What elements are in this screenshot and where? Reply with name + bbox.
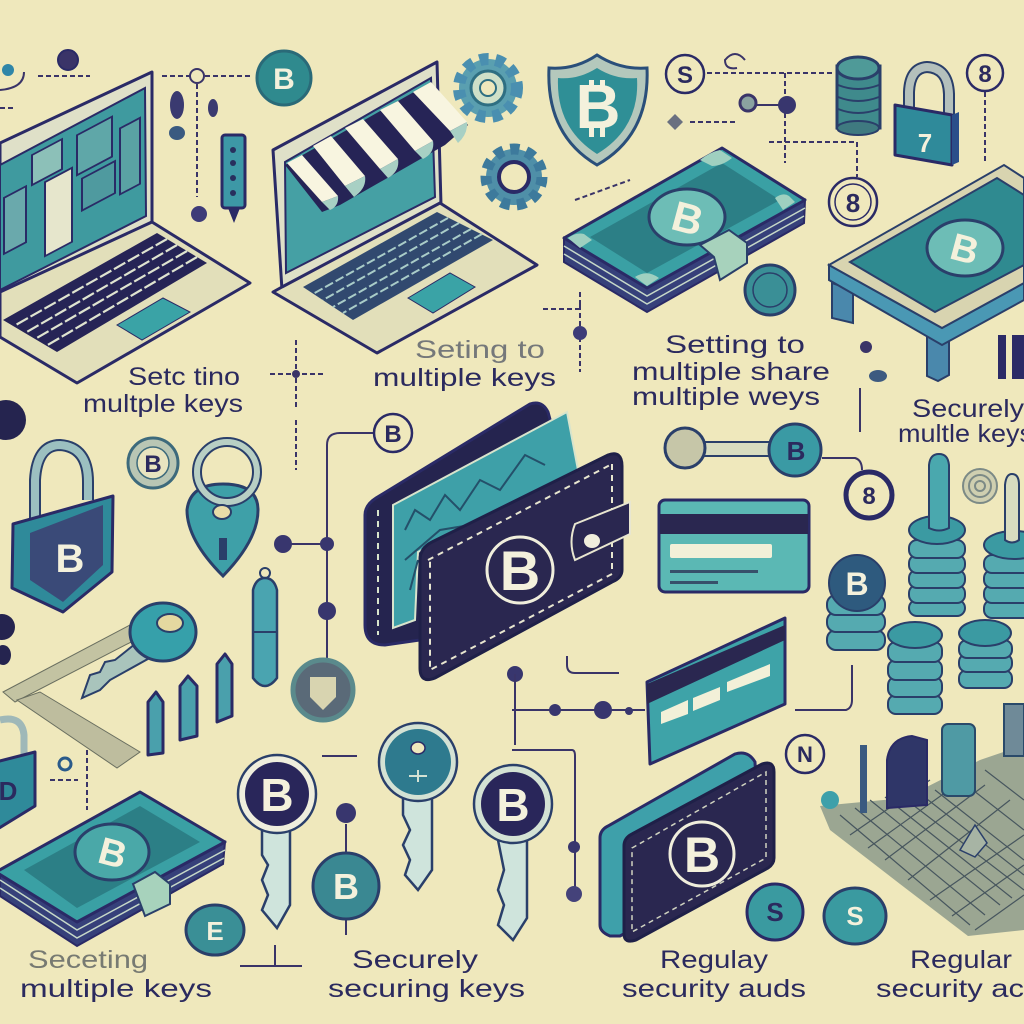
icon: heart lock with ring <box>187 442 258 576</box>
icon: lower left padlock <box>0 719 87 830</box>
gear: upper <box>459 59 517 117</box>
text: label 3: multiple weys <box>632 383 820 411</box>
text: bottom label 2: Securely <box>352 946 479 974</box>
icon: key fob <box>222 135 245 223</box>
icon: horizontal key: B <box>787 436 805 466</box>
coin: grey bitcoin: B <box>144 451 162 478</box>
table with bill <box>829 165 1024 381</box>
text: label 4 <box>898 395 1024 448</box>
text: label 3: multiple share <box>632 358 830 386</box>
coin: grey bitcoin <box>128 438 178 488</box>
coin: number circle <box>829 178 877 226</box>
icon: coin cylinder <box>837 57 880 135</box>
text: label 2: Seting to <box>415 336 545 364</box>
coin: circle 8: 8 <box>862 483 876 510</box>
coin: small E: E <box>206 916 224 946</box>
coin: top bitcoin <box>257 51 311 105</box>
icon: teal key with strips <box>3 603 196 768</box>
text: label 1 <box>83 363 243 418</box>
icon: bitcoin shield: B <box>576 73 620 142</box>
text: label 4: multle keys <box>898 420 1024 448</box>
text: bottom label 2: securing keys <box>328 975 525 1003</box>
icon: padlock with shield: B <box>56 537 84 581</box>
text: bottom label 3 <box>622 946 806 1003</box>
text: label 2: multiple keys <box>373 364 556 392</box>
text: bottom label 1: Seceting <box>28 946 148 974</box>
coin stacks with pins: B <box>845 566 869 602</box>
text: bottom label 3: Regulay <box>660 946 769 974</box>
icon: horizontal key <box>665 424 862 476</box>
text: bottom label 4 <box>876 946 1024 1003</box>
icon: bitcoin shield <box>549 55 647 165</box>
text: bottom label 2 <box>328 946 525 1003</box>
money stack: lower <box>0 792 225 946</box>
money stack: lower: B <box>94 830 131 878</box>
text: label 1: Setc tino <box>128 363 240 391</box>
text: label 4: Securely <box>912 395 1024 423</box>
icon: large bitcoin wallet <box>365 403 630 680</box>
coin: number circle: 8 <box>846 188 860 218</box>
icon: key with keyhole head <box>379 723 457 890</box>
gear: lower <box>486 149 542 205</box>
icon: padlock top right <box>895 67 959 165</box>
connectors: top right <box>540 54 985 309</box>
icon: large bitcoin wallet: B <box>500 539 540 602</box>
text: bottom label 1: multiple keys <box>20 975 212 1003</box>
icon: key with bitcoin head right: B <box>496 779 530 831</box>
money stack: upper: B <box>667 192 708 245</box>
text: bottom label 4: security ac <box>876 975 1024 1003</box>
coin: small teal <box>745 265 795 315</box>
credit card: front facing <box>659 500 809 592</box>
coin: B teal with stem: B <box>333 866 359 907</box>
icon: key with bitcoin head: B <box>260 769 294 821</box>
text: bottom label 1 <box>20 946 212 1003</box>
coin: S upper: S <box>677 62 693 89</box>
text: label 3: Setting to <box>665 331 805 359</box>
coin stacks with pins <box>827 454 1024 714</box>
coin: top bitcoin: B <box>273 63 295 96</box>
network: centre vertical with B node <box>274 414 412 660</box>
table with bill: B <box>946 226 983 274</box>
coin: small E <box>186 905 244 955</box>
connectors: middle divider <box>270 305 1024 470</box>
icon: fingerprint <box>963 469 997 503</box>
laptop: dashboard <box>0 72 250 383</box>
icon: dark circle left edge <box>0 400 26 440</box>
money stack: upper <box>564 148 805 312</box>
coin: S upper <box>666 55 704 93</box>
text: bottom label 3: security auds <box>622 975 806 1003</box>
coin: N circle <box>786 735 824 773</box>
coin: B teal with stem <box>313 803 379 935</box>
network: card connectors <box>507 656 852 902</box>
icon: key with bitcoin head right <box>474 765 552 940</box>
coin: number circle top right: 8 <box>978 61 992 88</box>
text: label 1: multple keys <box>83 390 243 418</box>
coin: small S right: S <box>846 901 864 931</box>
network: centre vertical with B node: B <box>384 421 402 448</box>
coin: small S right <box>824 888 886 944</box>
icon: capsule fob <box>253 568 277 686</box>
illustration: circuit board city <box>820 704 1024 936</box>
icon: key with bitcoin head <box>238 755 316 928</box>
icon: flat bitcoin wallet: B <box>684 827 720 883</box>
text: label 3 <box>632 331 830 411</box>
coin: small S left: S <box>766 897 784 927</box>
coin: shield medal <box>293 660 353 720</box>
text: bottom label 4: Regular <box>910 946 1012 974</box>
icon: flat bitcoin wallet <box>600 753 774 941</box>
connectors: lower rules <box>240 756 357 966</box>
icon: three pillars <box>148 654 232 755</box>
connectors: top left <box>0 50 250 222</box>
coin: number circle top right <box>967 55 1003 91</box>
coin: small S left <box>747 884 803 940</box>
coin: N circle: N <box>797 742 813 767</box>
coin: circle 8 <box>846 472 892 518</box>
icon: padlock top right: 7 <box>918 128 932 158</box>
icon: padlock with shield <box>12 445 113 612</box>
text: label 2 <box>373 336 556 392</box>
icon: dark circles at left edge <box>0 614 15 665</box>
credit card: angled <box>647 618 785 764</box>
laptop: storefront with awning <box>273 62 537 353</box>
